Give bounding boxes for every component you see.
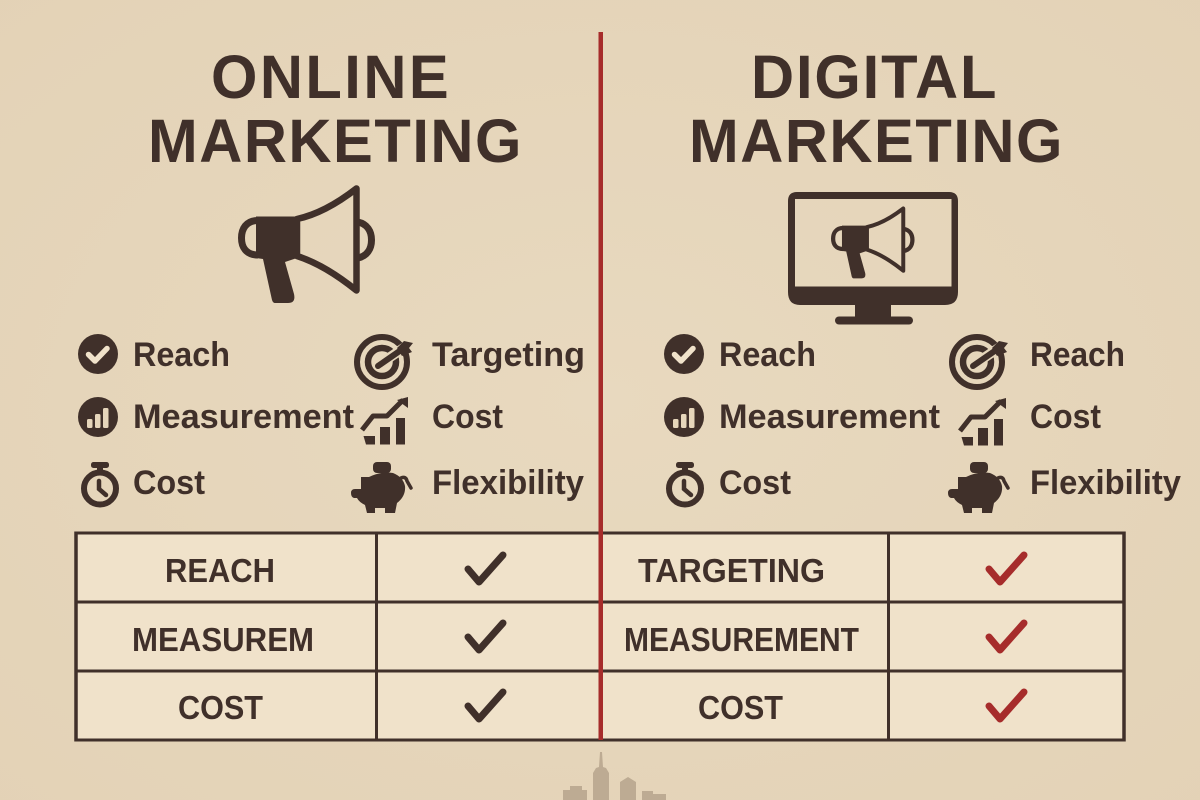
row text: measurement: MEASUREMENT	[624, 622, 859, 659]
icon: reach check	[664, 334, 704, 374]
icon: megaphone	[242, 188, 372, 303]
label: cost: Cost	[1030, 398, 1101, 436]
icon: stopwatch	[84, 462, 116, 504]
row text: reach: REACH	[165, 553, 275, 590]
icon: target	[952, 337, 1008, 387]
center divider	[598, 32, 603, 740]
panel: online marketing features	[78, 334, 585, 513]
row text: cost: COST	[698, 690, 783, 727]
title: online marketing: MARKETING	[148, 106, 521, 175]
label: measurement: Measurement	[133, 398, 354, 436]
title: digital marketing: DIGITAL	[751, 42, 996, 111]
row text: measurem: MEASUREM	[132, 622, 314, 659]
comparison table	[76, 532, 1124, 742]
red check marks	[989, 555, 1024, 719]
label: measurement: Measurement	[719, 398, 940, 436]
icon: reach check	[78, 334, 118, 374]
row text: targeting: TARGETING	[638, 553, 825, 590]
icon: growth chart	[960, 398, 1006, 446]
icon: piggy bank	[948, 462, 1008, 513]
row text: cost: COST	[178, 690, 263, 727]
icon: monitor with megaphone	[788, 192, 958, 324]
label: flexibility: Flexibility	[432, 464, 584, 502]
label: reach: Reach	[719, 336, 816, 374]
title: digital marketing: MARKETING	[689, 106, 1062, 175]
label: reach: Reach	[1030, 336, 1125, 374]
label: cost: Cost	[719, 464, 791, 502]
label: reach: Reach	[133, 336, 230, 374]
dark check marks	[468, 555, 503, 719]
title: digital marketing	[689, 42, 1062, 175]
icon: measurement bars	[664, 397, 704, 437]
title: online marketing: ONLINE	[211, 42, 449, 111]
icon: measurement bars	[78, 397, 118, 437]
label: cost: Cost	[133, 464, 205, 502]
icon: piggy bank	[351, 462, 411, 513]
label: flexibility: Flexibility	[1030, 464, 1181, 502]
label: cost: Cost	[432, 398, 503, 436]
panel: digital marketing features	[664, 334, 1181, 513]
icon: target	[357, 337, 413, 387]
skyline	[563, 752, 666, 800]
icon: stopwatch	[669, 462, 701, 504]
icon: growth chart	[362, 397, 408, 444]
label: targeting: Targeting	[432, 336, 585, 374]
title: online marketing	[148, 42, 521, 175]
